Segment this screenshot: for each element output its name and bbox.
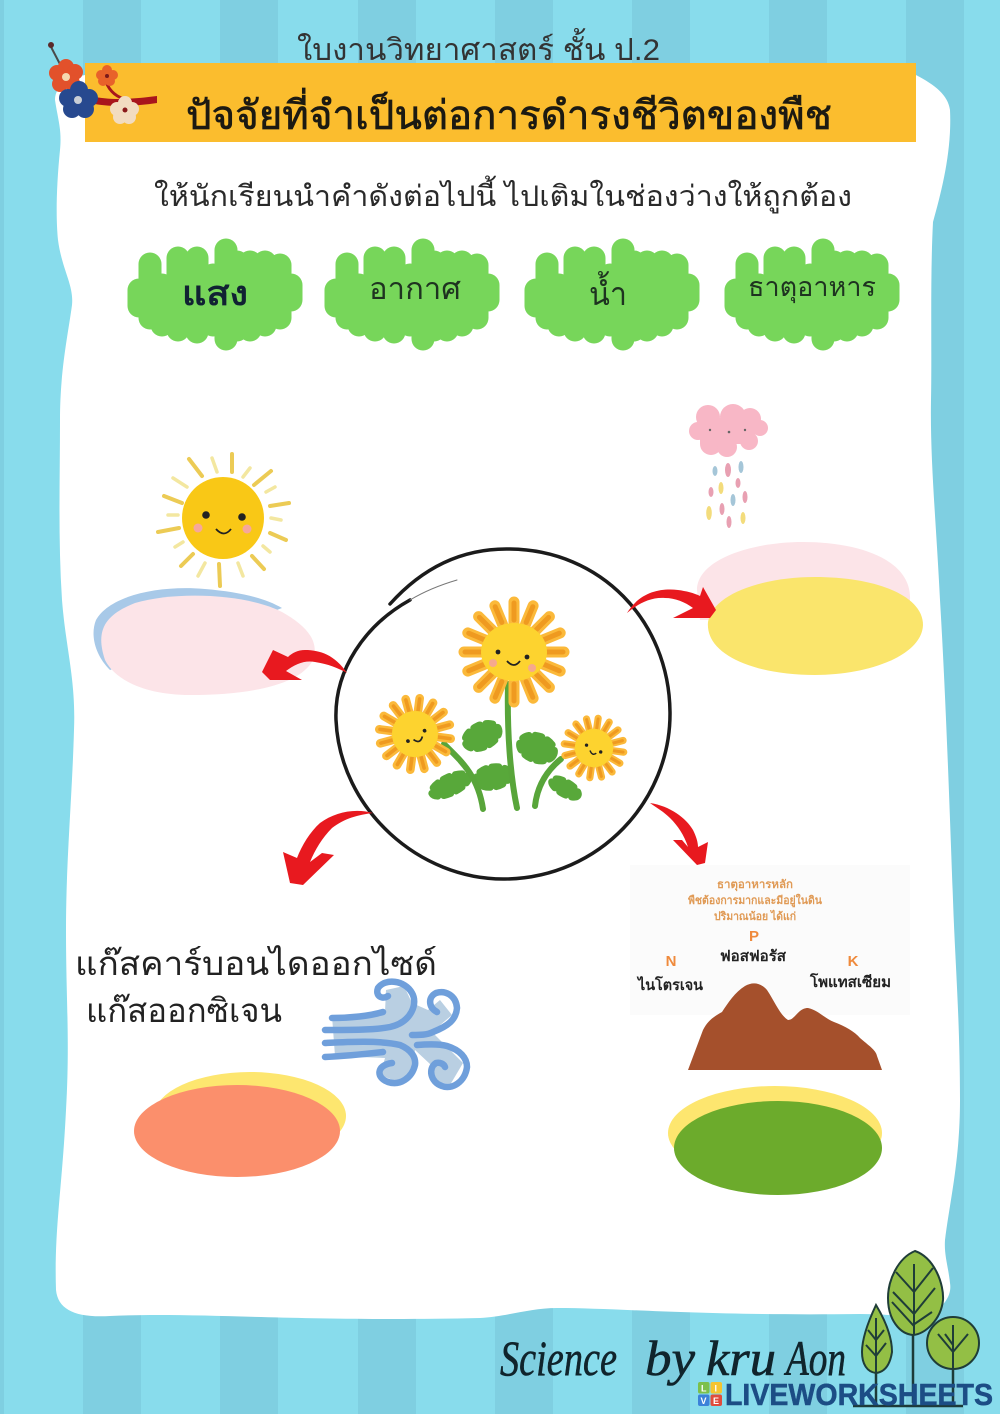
arrow: to light (262, 650, 347, 680)
word chip: nutrients (736, 250, 888, 339)
diagram caption: ธาตุอาหารหลัก (717, 878, 793, 892)
watermark logo: E (713, 1396, 719, 1406)
leaves (428, 718, 581, 801)
icon: rain cloud (689, 404, 768, 528)
word chip: water (536, 250, 688, 339)
diagram caption: ปริมาณน้อย ได้แก่ (714, 909, 796, 923)
flower: left (371, 690, 459, 778)
plant illustration (371, 602, 628, 809)
answer blank: nutrients (668, 1086, 882, 1195)
word chip: air (336, 250, 488, 339)
NPK soil diagram (630, 865, 910, 1070)
watermark logo: V (700, 1396, 707, 1406)
answer blank: air (134, 1072, 346, 1177)
icon: trees (853, 1251, 979, 1406)
flower: right (560, 714, 628, 782)
air label: แก๊สออกซิเจน (86, 992, 282, 1029)
potassium (809, 953, 891, 991)
title banner (85, 63, 916, 142)
answer blank: light (94, 588, 315, 695)
arrow: to air (283, 811, 373, 885)
author credit: Aon (784, 1330, 846, 1386)
title: ปัจจัยที่จำเป็นต่อการดำรงชีวิตของพืช (186, 88, 832, 138)
word: light: แสง (182, 275, 248, 313)
answer blank: water (697, 542, 923, 675)
watermark logo: L (701, 1384, 707, 1394)
soil mound (688, 983, 882, 1070)
diagram caption: พืชต้องการมากและมีอยู่ในดิน (688, 893, 822, 908)
watermark logo (698, 1377, 993, 1412)
ring around plant (336, 549, 670, 879)
nitrogen (636, 953, 704, 994)
arrow: to water (627, 587, 716, 618)
nitrogen: N (666, 953, 676, 970)
potassium: โพแทสเซียม (809, 972, 891, 991)
phosphorus: ฟอสฟอรัส (720, 948, 787, 965)
potassium: K (848, 953, 859, 970)
author credit: Science (500, 1330, 617, 1386)
watermark logo: I (714, 1384, 717, 1394)
nitrogen: ไนโตรเจน (636, 975, 704, 994)
word: nutrients: ธาตุอาหาร (748, 272, 876, 304)
phosphorus (720, 928, 787, 965)
word: air: อากาศ (369, 273, 461, 306)
author credit: by (645, 1330, 696, 1386)
author credit: kru (706, 1330, 776, 1386)
white paper panel (55, 75, 960, 1319)
arrow: to nutrients (650, 803, 708, 865)
icon: sun (158, 454, 289, 586)
word chip: light (139, 250, 291, 339)
icon: wind (325, 982, 467, 1087)
flower: main (464, 602, 564, 702)
worksheet heading: ใบงานวิทยาศาสตร์ ชั้น ป.2 (297, 28, 660, 67)
instructions: ให้นักเรียนนำคำดังต่อไปนี้ ไปเติมในช่องว่างให้ถูกต้อง (154, 175, 852, 214)
stems (444, 684, 561, 809)
word: water: น้ำ (589, 271, 627, 312)
phosphorus: P (749, 928, 759, 945)
air label: แก๊สคาร์บอนไดออกไซด์ (75, 945, 437, 982)
icon: flower branch (48, 42, 157, 124)
